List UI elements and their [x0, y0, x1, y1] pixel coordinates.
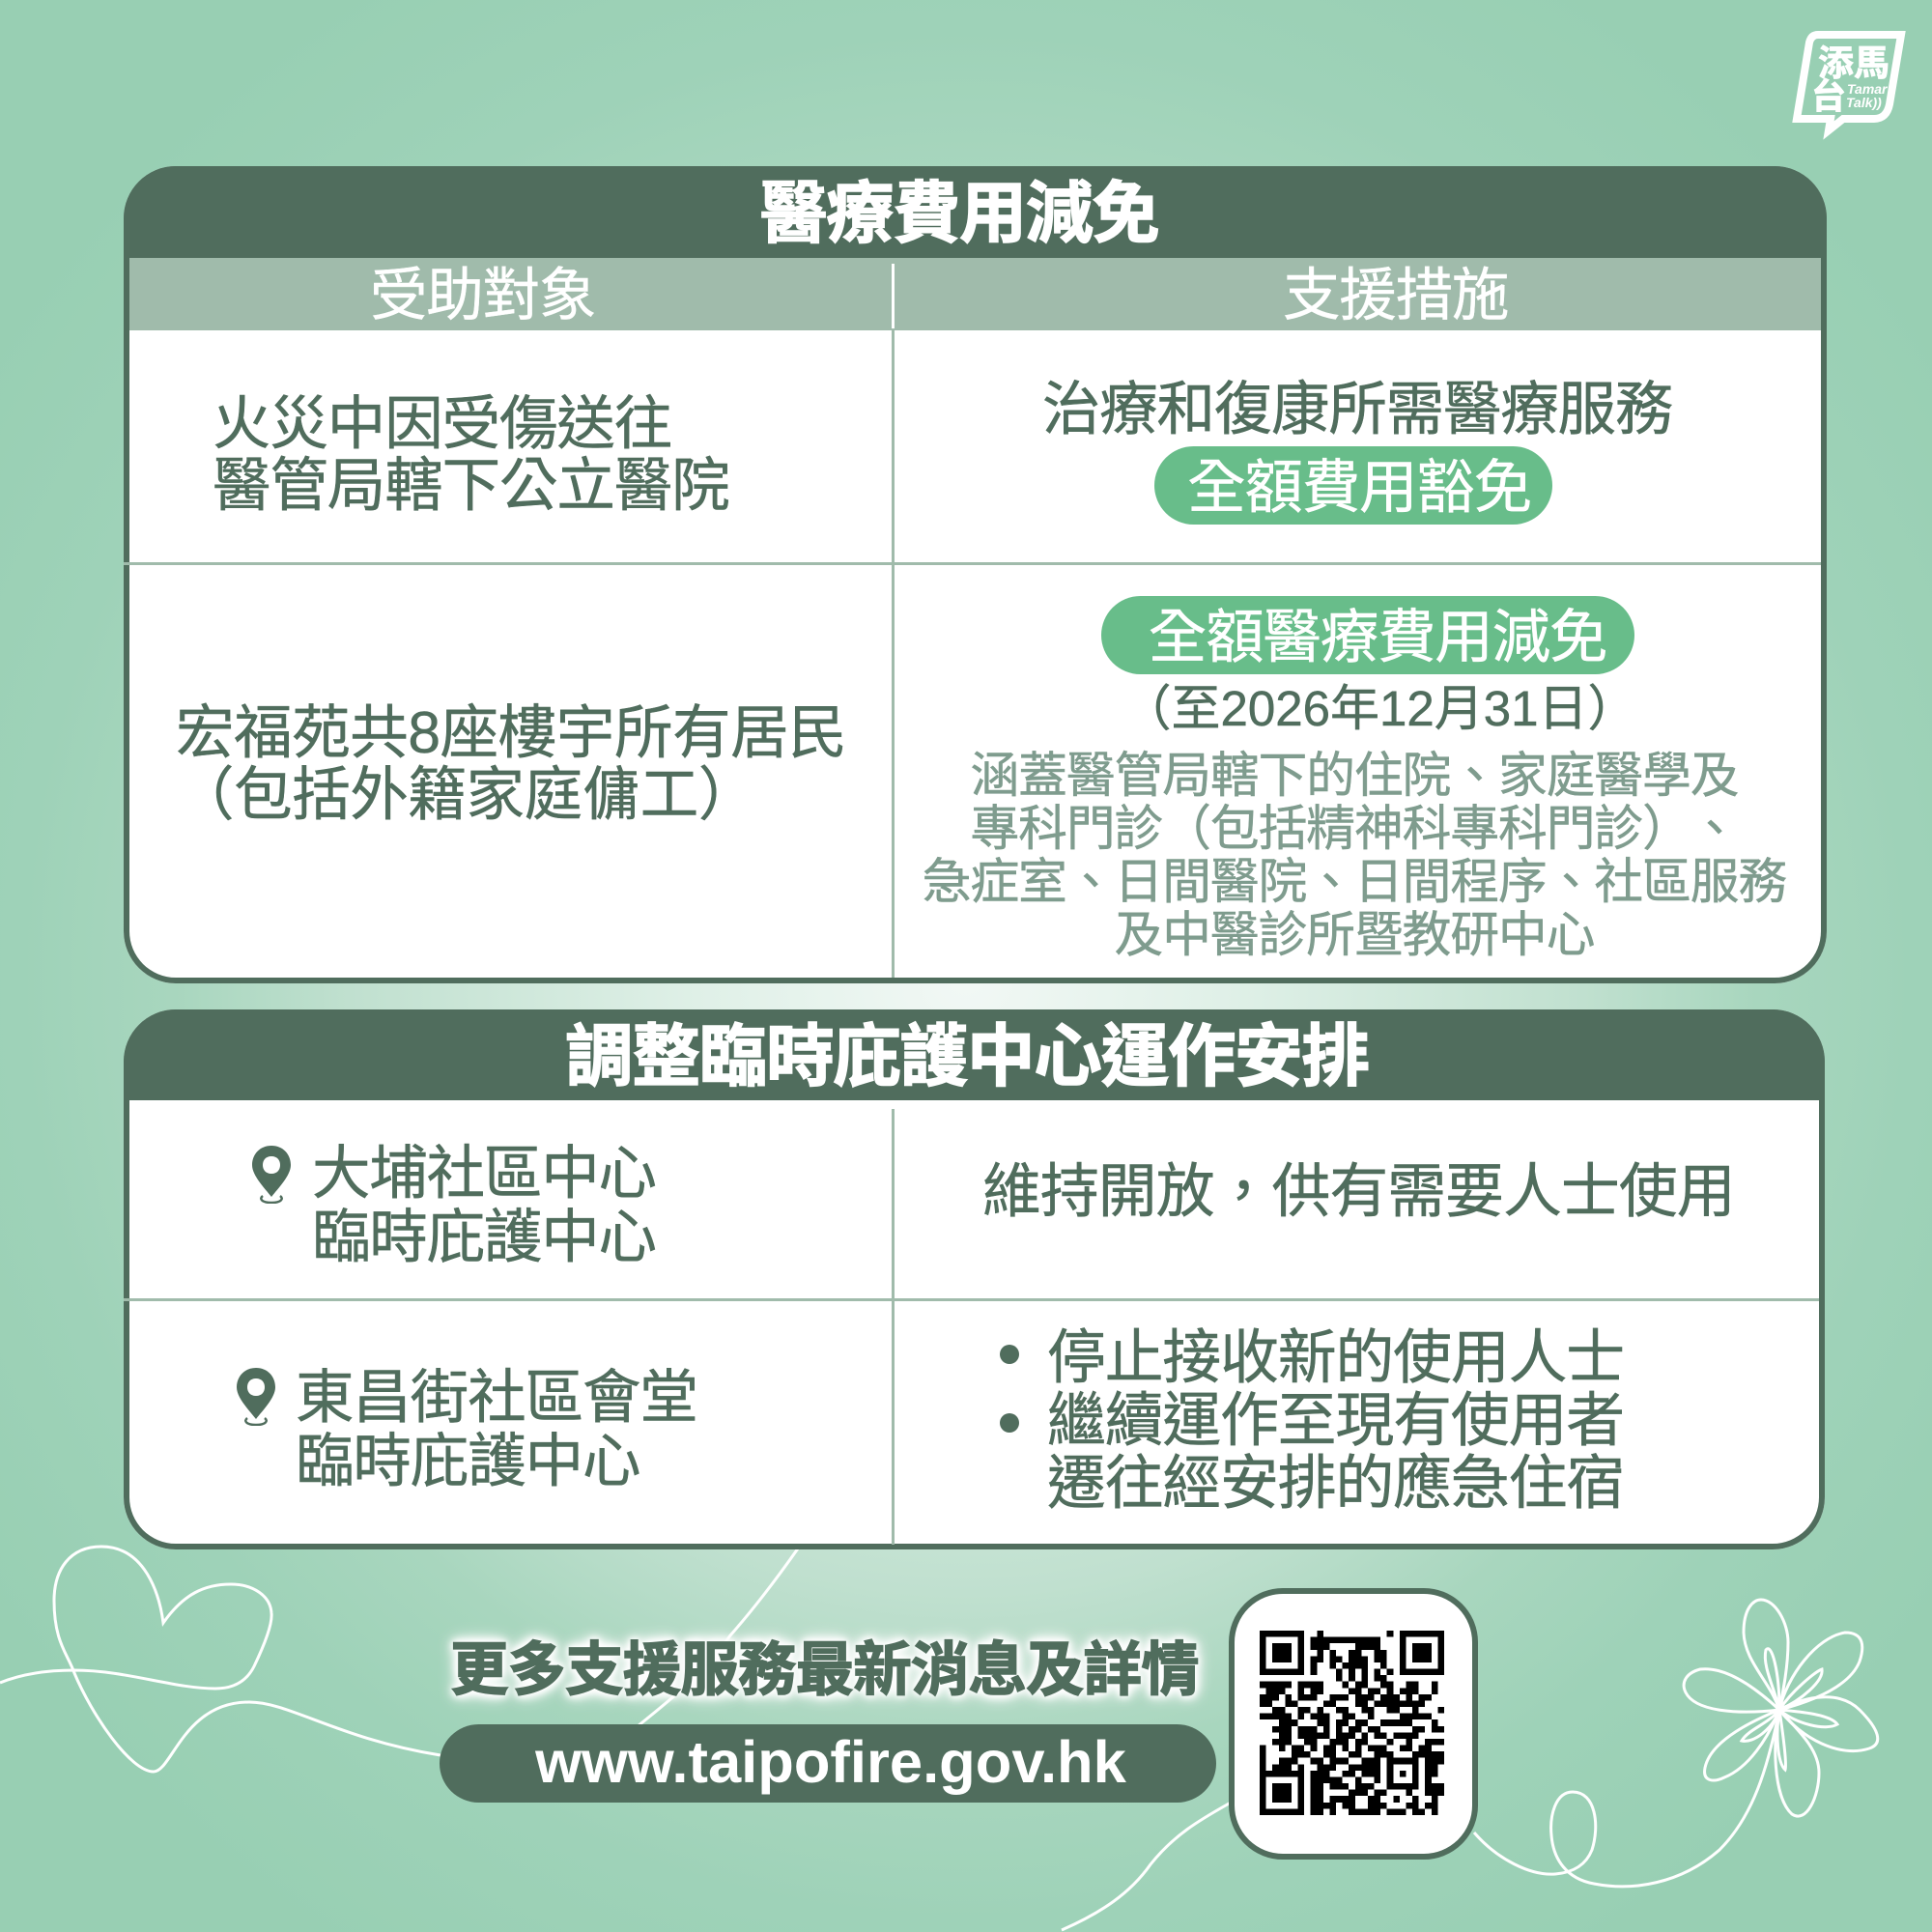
shelter 1 name: 大埔社區中心	[312, 1140, 656, 1206]
pill: full medical fee waiver: 全額醫療費用減免	[1149, 604, 1606, 669]
shelter 2 arrangement bullets: 繼續運作至現有使用者	[1047, 1387, 1624, 1453]
column header row	[129, 258, 1821, 330]
coverage details	[923, 748, 1787, 962]
shelter 1 arrangement: 維持開放，供有需要人士使用	[982, 1158, 1735, 1224]
panel: medical fee waiver	[124, 166, 1827, 983]
QR code card	[1229, 1588, 1478, 1860]
row 1 recipient text	[213, 390, 729, 518]
heading: temporary shelter arrangements: 調整臨時庇護中心運作安排	[565, 1018, 1369, 1094]
shelter 2 arrangement bullets: 遷往經安排的應急住宿	[1047, 1450, 1624, 1516]
row 2 recipient text	[176, 699, 846, 827]
logo: Tamar Talk speech bubble: Talk))	[1846, 95, 1882, 110]
date note: （至2026年12月31日）	[1122, 681, 1636, 736]
coverage details: 急症室、日間醫院、日間程序、社區服務	[923, 854, 1786, 909]
logo: Tamar Talk speech bubble: Tamar	[1847, 81, 1889, 97]
logo: Tamar Talk speech bubble: 添馬	[1818, 34, 1889, 86]
icon: location pin	[252, 1146, 291, 1204]
row 2 recipient text: （包括外籍家庭傭工）	[176, 761, 756, 827]
heading: more support info: 更多支援服務最新消息及詳情	[450, 1636, 1199, 1702]
shelter 2 arrangement bullets	[1047, 1324, 1624, 1516]
row 1 recipient text: 火災中因受傷送往	[213, 390, 671, 456]
panel header bar	[124, 1009, 1825, 1100]
website URL pill	[440, 1724, 1216, 1803]
row 2 recipient text: 宏福苑共8座樓宇所有居民	[176, 699, 846, 765]
icon: location pin	[237, 1368, 275, 1426]
decorative white flower with looping stem	[1473, 1598, 1880, 1888]
website URL pill: www.taipofire.gov.hk	[535, 1729, 1126, 1796]
shelter 2 name	[296, 1364, 697, 1493]
bullet marker	[1000, 1413, 1019, 1433]
coverage details: 專科門診（包括精神科專科門診）、	[970, 801, 1739, 856]
decorative white line: lower left of QR	[1061, 1803, 1229, 1932]
panel: temporary shelter arrangements	[124, 1009, 1825, 1549]
pill: full fee waiver: 全額費用豁免	[1187, 454, 1531, 520]
logo: Tamar Talk speech bubble	[1792, 31, 1906, 139]
QR code	[1260, 1631, 1444, 1815]
decorative white line: diagonal	[638, 1549, 799, 1724]
coverage details: 涵蓋醫管局轄下的住院、家庭醫學及	[970, 748, 1739, 803]
logo: Tamar Talk speech bubble: 台	[1811, 69, 1846, 119]
coverage details: 及中醫診所暨教研中心	[1115, 907, 1594, 962]
shelter 2 arrangement bullets: 停止接收新的使用人士	[1047, 1324, 1624, 1390]
shelter 2 name: 東昌街社區會堂	[296, 1364, 697, 1430]
column header: recipients: 受助對象	[370, 263, 595, 327]
row 1 recipient text: 醫管局轄下公立醫院	[213, 452, 729, 518]
row 1 measure text: 治療和復康所需醫療服務	[1042, 376, 1672, 441]
bullet marker	[1000, 1345, 1019, 1364]
shelter 2 name: 臨時庇護中心	[296, 1428, 639, 1493]
column header: measures: 支援措施	[1283, 263, 1508, 327]
shelter 1 name	[312, 1140, 656, 1269]
heading: medical fee waiver: 醫療費用減免	[760, 176, 1158, 251]
panel header bar	[124, 166, 1827, 258]
shelter 1 name: 臨時庇護中心	[312, 1204, 656, 1269]
decorative white line: heart	[0, 1546, 440, 1774]
